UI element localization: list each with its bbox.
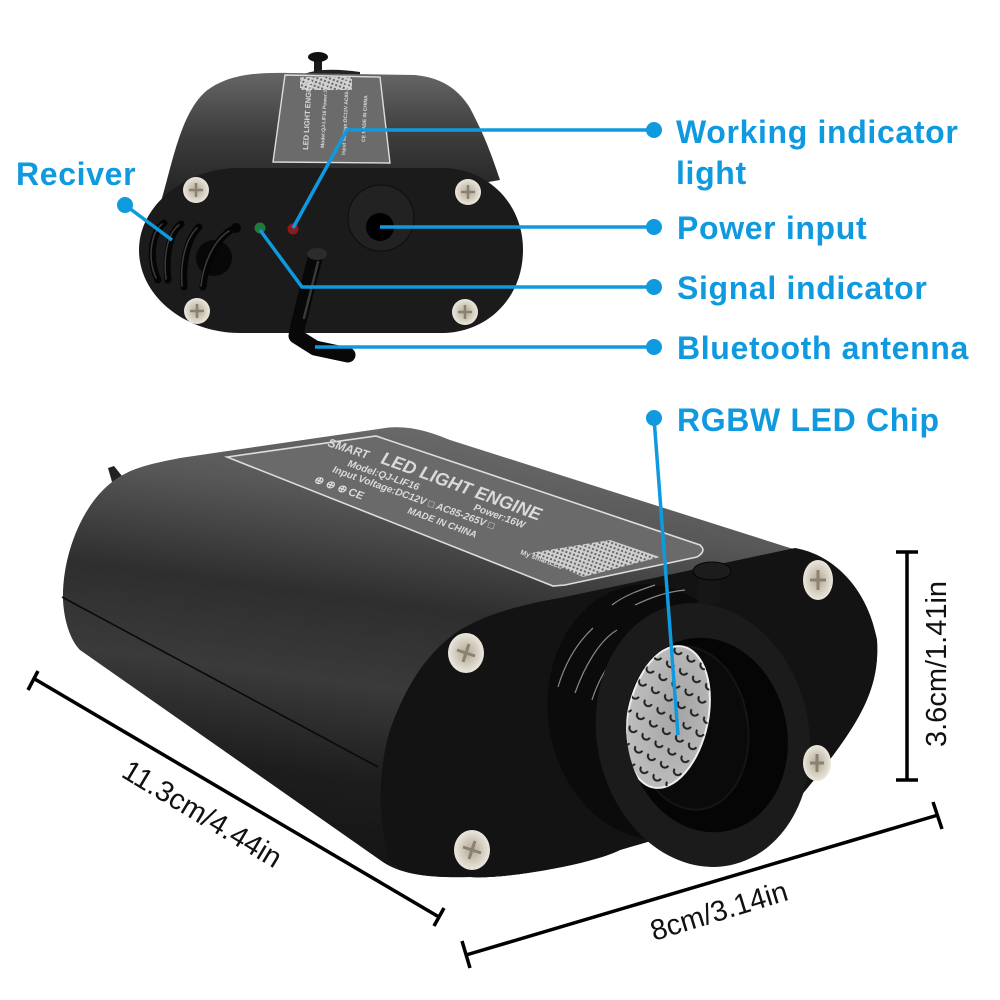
callout: Power input: Power input — [677, 210, 867, 246]
spec label plate: Input Voltage:DC12V AC85-265V — [341, 78, 351, 155]
callout: Reciver: Reciver — [16, 156, 136, 192]
top device photo — [139, 52, 523, 355]
top shell — [160, 73, 500, 215]
spec label plate: CE MADE IN CHINA — [361, 95, 369, 142]
spec label plate: Model:QJ-LIF16 Power:16W — [320, 82, 329, 148]
screws — [183, 177, 481, 325]
callout: Working indicator light: Working indicator — [676, 114, 958, 150]
callout: Working indicator light: light — [676, 155, 747, 191]
callout: Signal indicator: Signal indicator — [677, 270, 927, 306]
spec label plate: Power:16W — [472, 502, 528, 532]
dimension: width: 8cm/3.14in — [647, 876, 792, 948]
bottom device photo — [62, 427, 877, 887]
spec label plate: SMART — [326, 436, 372, 462]
spec label plate: MADE IN CHINA — [406, 505, 478, 541]
dimension: height: 3.6cm/1.41in — [921, 581, 953, 747]
spec label plate: ⊕ ⊕ ⊕ CE — [312, 474, 366, 503]
spec label plate: LED LIGHT ENGINE — [301, 79, 314, 150]
callout: RGBW LED Chip: RGBW LED Chip — [677, 402, 940, 438]
spec label plate — [273, 75, 390, 163]
rear knob — [108, 466, 122, 482]
barrel highlights — [558, 585, 685, 700]
top screw knob — [300, 52, 360, 80]
callout: Bluetooth antenna — [315, 330, 969, 366]
dimension: width — [462, 802, 942, 968]
front ring — [572, 583, 834, 887]
big shell — [63, 427, 877, 877]
power socket — [348, 185, 414, 251]
callout: Power input — [380, 210, 867, 246]
callout: Bluetooth antenna: Bluetooth antenna — [677, 330, 969, 366]
dimension: length — [28, 671, 444, 926]
inner barrel ring — [621, 639, 759, 817]
ring opening — [608, 623, 806, 847]
front face — [139, 168, 523, 333]
barrel behind ring — [531, 571, 773, 853]
mounting thumb screw — [693, 562, 731, 604]
antenna — [296, 248, 348, 355]
spec label plate — [227, 436, 703, 586]
front face — [381, 548, 877, 877]
spec label plate: Input Voltage:DC12V □ AC85-265V □ — [331, 464, 496, 532]
lower shell seam — [62, 597, 378, 767]
receiver coil — [151, 223, 232, 287]
callout: Working indicator light — [293, 114, 958, 228]
screws — [448, 560, 833, 870]
RGBW LED chip — [626, 645, 711, 789]
indicator lights — [231, 222, 298, 234]
spec label plate: My smartLED — [519, 549, 564, 571]
callout: RGBW LED Chip — [646, 402, 940, 735]
callout: Signal indicator — [260, 230, 927, 306]
spec label plate: LED LIGHT ENGINE — [379, 448, 545, 525]
callout: Reciver — [16, 156, 172, 240]
dimension: height — [896, 552, 953, 780]
dimension: length: 11.3cm/4.44in — [116, 755, 287, 875]
spec label plate: Model:QJ-LIF16 — [346, 458, 421, 493]
